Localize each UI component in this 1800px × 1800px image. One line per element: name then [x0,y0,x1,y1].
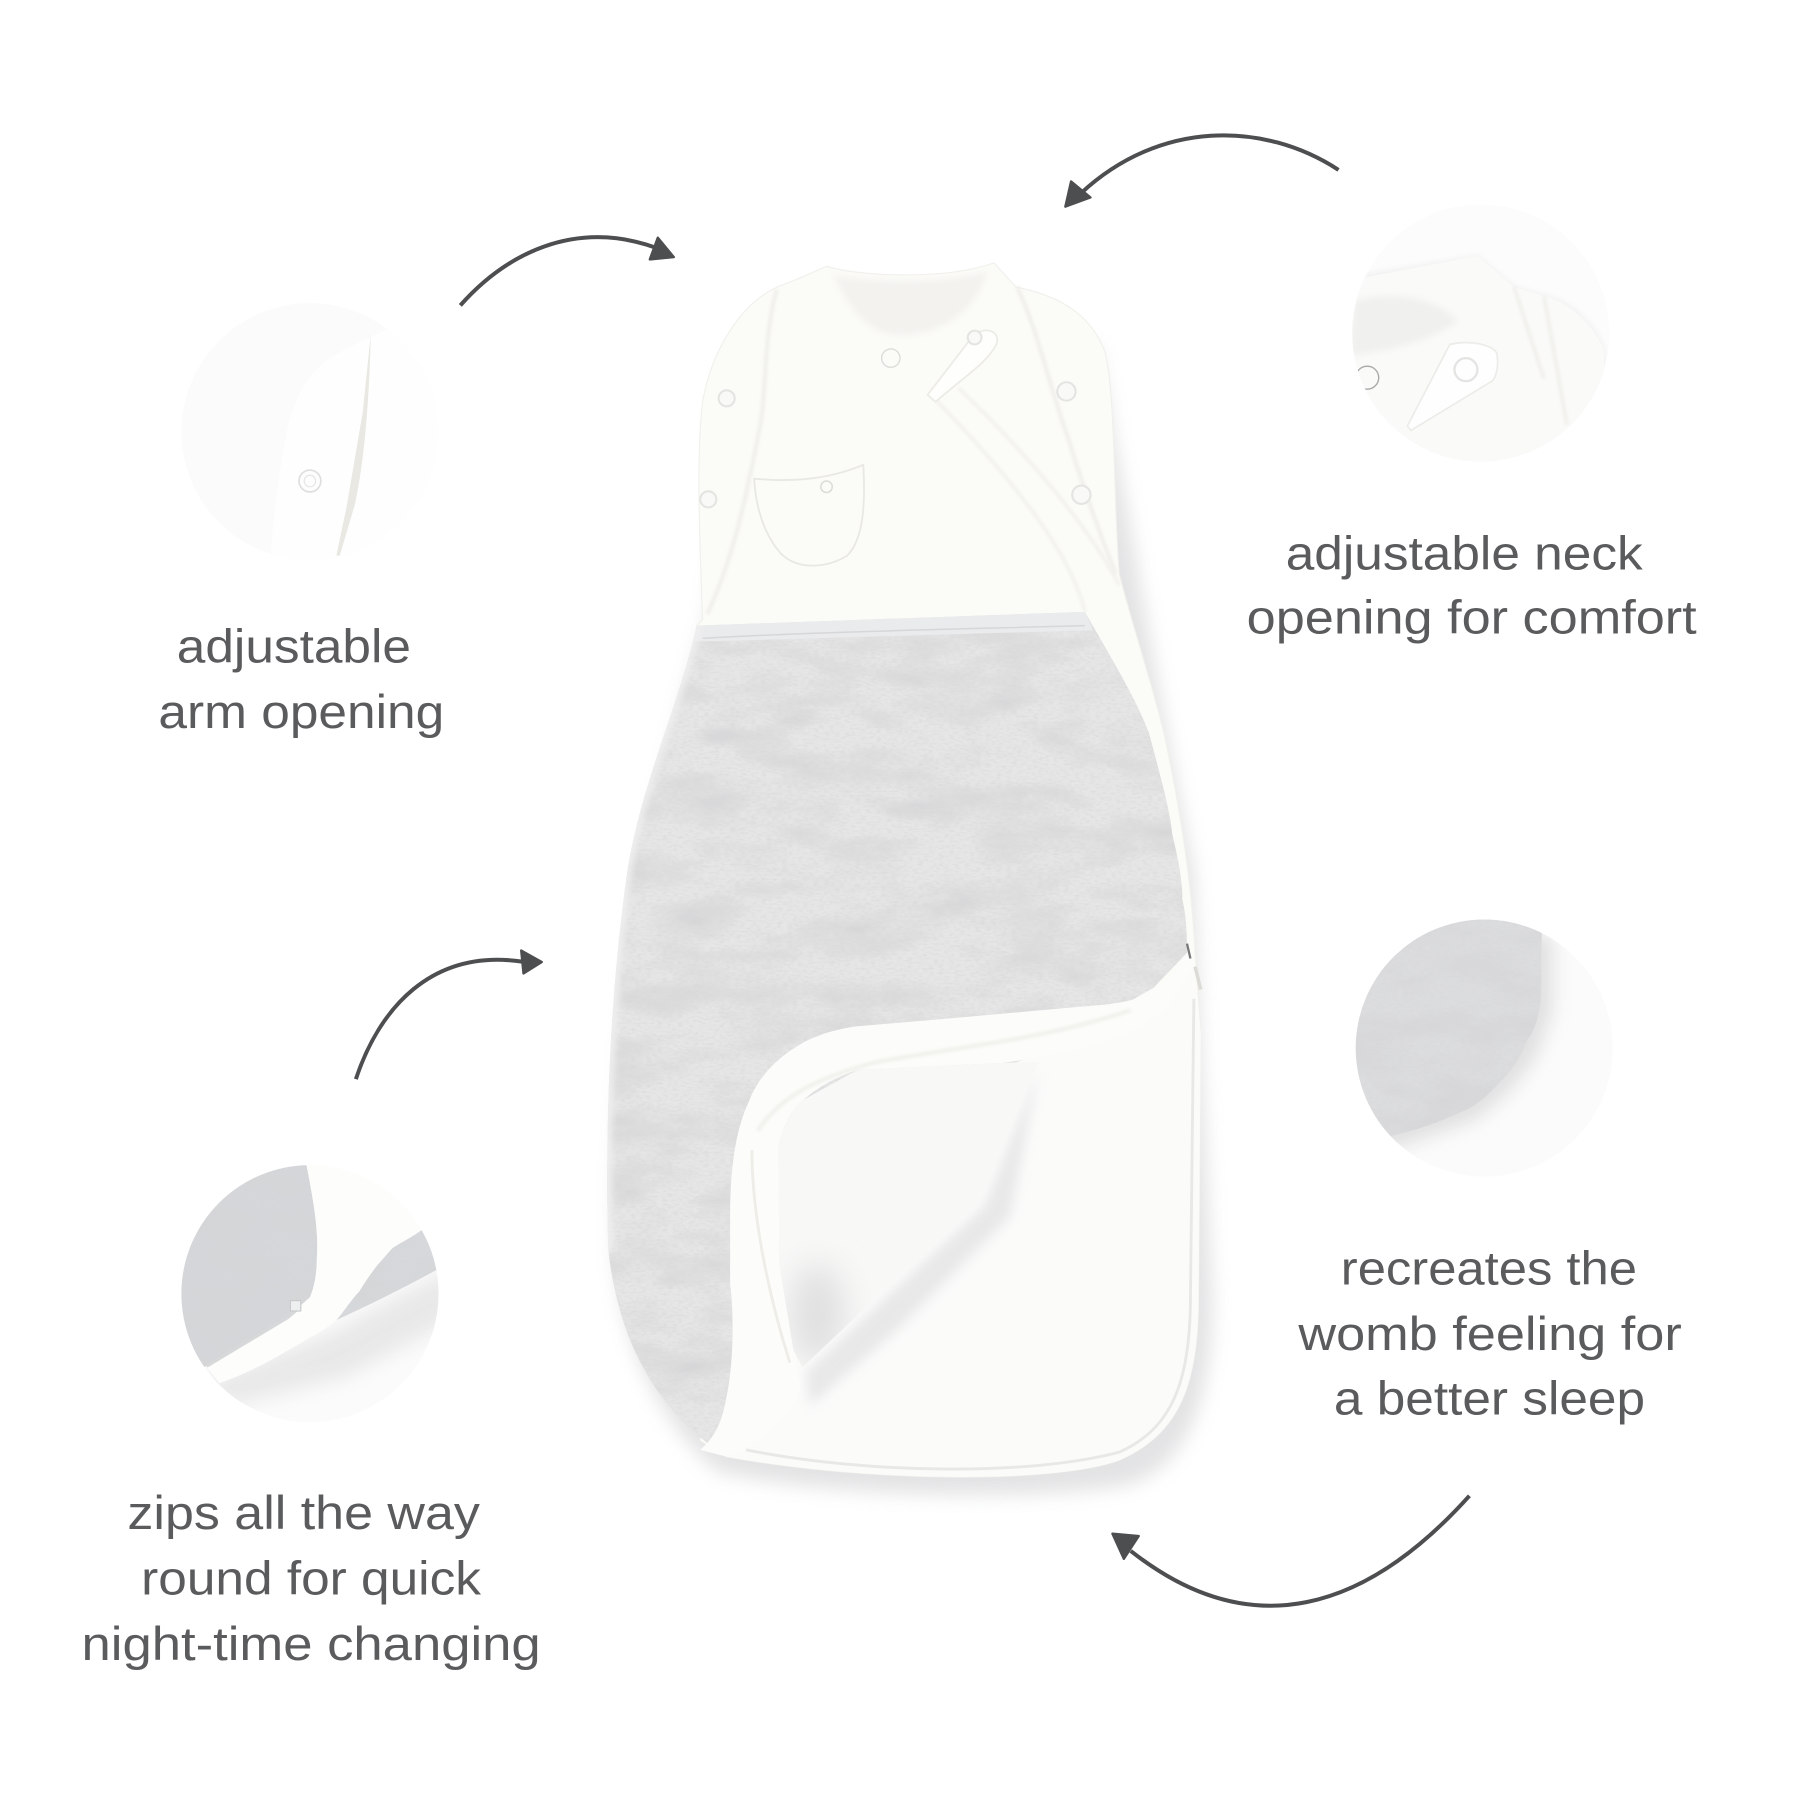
circle: grey fabric detail [1356,920,1562,1152]
bottom zip line [746,999,1194,1469]
wrap front seam [932,388,1119,612]
circle: arm opening detail [298,335,371,556]
callout: recreates the womb feeling: womb feeling for [1297,1307,1682,1360]
arrow to base of bag [1112,1496,1469,1606]
arrow to zip [356,951,542,1079]
caption: adjustable arm opening: adjustable [177,619,411,672]
zip pull [1195,967,1201,990]
callout: adjustable neck opening [1065,135,1697,644]
snap buttons [700,331,1091,507]
callout: adjustable neck opening: opening for comfort [1247,591,1697,644]
callout: adjustable arm opening [158,237,674,738]
callout: recreates the womb feeling: a better sleep [1334,1371,1645,1424]
garment white base [697,263,1201,1477]
chest pocket [754,465,864,566]
caption: zips all the way round: zips all the way [127,1486,480,1539]
arrow to neck [1065,135,1339,207]
logo mark [882,349,900,367]
interior triangle [778,1062,1015,1364]
callout: zips all the way round: round for quick [141,1552,481,1605]
collar neck hollow [833,271,987,335]
flap zip line [752,1150,790,1363]
arrow to sleeve [460,237,674,305]
grey edge highlight [607,626,697,1251]
open flap interior panel [727,964,1201,1477]
grey lower panel [597,608,1205,1469]
garment: swaddle sleep bag [597,263,1212,1495]
callout: adjustable arm opening: arm opening [158,685,444,738]
sleeve fold lines [707,287,1116,614]
circle: zip detail [181,1165,438,1408]
inner fold crease [758,1010,1131,1131]
callout: zips all the way round [82,951,542,1670]
neck tab [928,330,997,402]
band at waist [693,611,1093,642]
callout: zips all the way round: night-time changing [82,1617,541,1670]
caption: womb feeling: recreates the [1341,1242,1637,1295]
caption: adjustable neck opening: adjustable neck [1286,526,1643,579]
circle: neck opening detail [1352,256,1606,432]
pocket snap [821,481,832,492]
callout: recreates the womb feeling [1112,895,1682,1606]
garment shadow [615,344,1212,1495]
shadow beneath diagonal fold [806,1068,1039,1406]
rolled fold of zip edge [700,953,1195,1457]
